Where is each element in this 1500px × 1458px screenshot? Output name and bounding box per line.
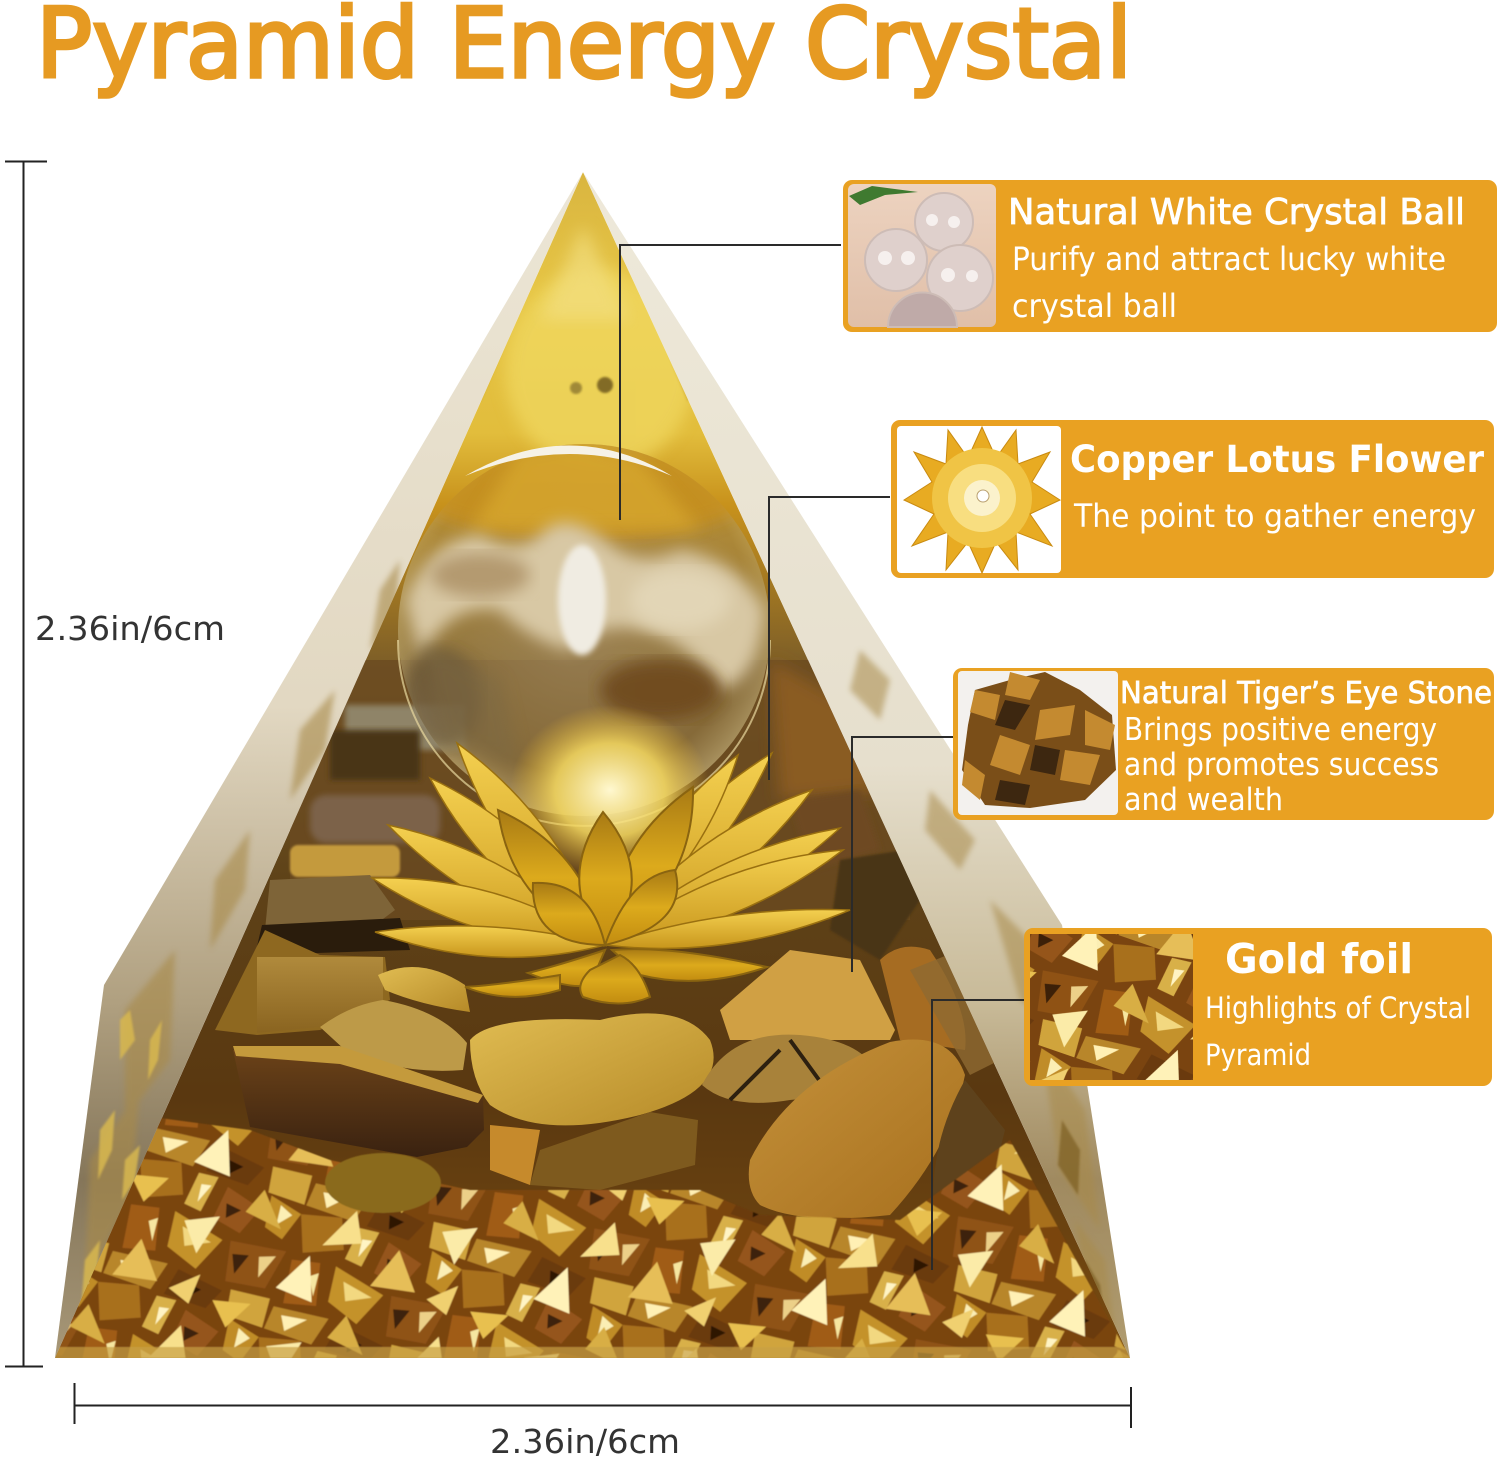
copper lotus flower [372,743,850,1004]
description [1012,240,1446,325]
leader line: tiger eye [852,737,955,972]
foreground tiger eye stones [215,930,1005,1230]
left side face [55,172,583,1358]
description: Pyramid [1205,1038,1311,1072]
thumbnail: lotus [904,427,1060,573]
description: Brings positive energy [1124,712,1437,748]
right side face [583,172,1130,1358]
height dimension line [5,161,47,1367]
panel: natural tiger's eye stone [953,668,1494,820]
crystal ball [398,440,770,826]
height label: 2.36in/6cm [35,609,225,648]
description: Highlights of Crystal [1205,991,1471,1025]
leader line: gold foil [932,1000,1025,1270]
thumbnail: tiger eye stones [958,671,1118,815]
heading: Natural Tiger’s Eye Stone [1120,676,1492,711]
description: and promotes success [1124,747,1439,783]
thumbnail: crystal balls [848,184,996,327]
tiger eye background stones [255,660,920,960]
description: Purify and attract lucky white [1012,240,1446,278]
leader line: crystal ball [620,245,841,520]
panel: gold foil [1024,928,1492,1086]
description [1205,991,1471,1072]
description: The point to gather energy [1073,497,1476,535]
glow behind lotus [516,708,706,868]
panel: natural white crystal ball [843,180,1497,332]
heading: Gold foil [1225,935,1413,983]
leader line: lotus [769,497,890,780]
front face interior [55,172,1130,1359]
description [1124,712,1439,818]
description: and wealth [1124,782,1283,818]
description: crystal ball [1012,287,1177,325]
thumbnail: gold foil [1030,934,1193,1080]
gold foil layer [55,1118,1130,1359]
width dimension line [74,1383,1131,1428]
heading: Copper Lotus Flower [1070,438,1485,481]
upper reflected ball [478,225,695,470]
heading: Natural White Crystal Ball [1008,192,1465,233]
panel: copper lotus flower [891,420,1494,578]
pyramid crystal photo [55,172,1130,1359]
